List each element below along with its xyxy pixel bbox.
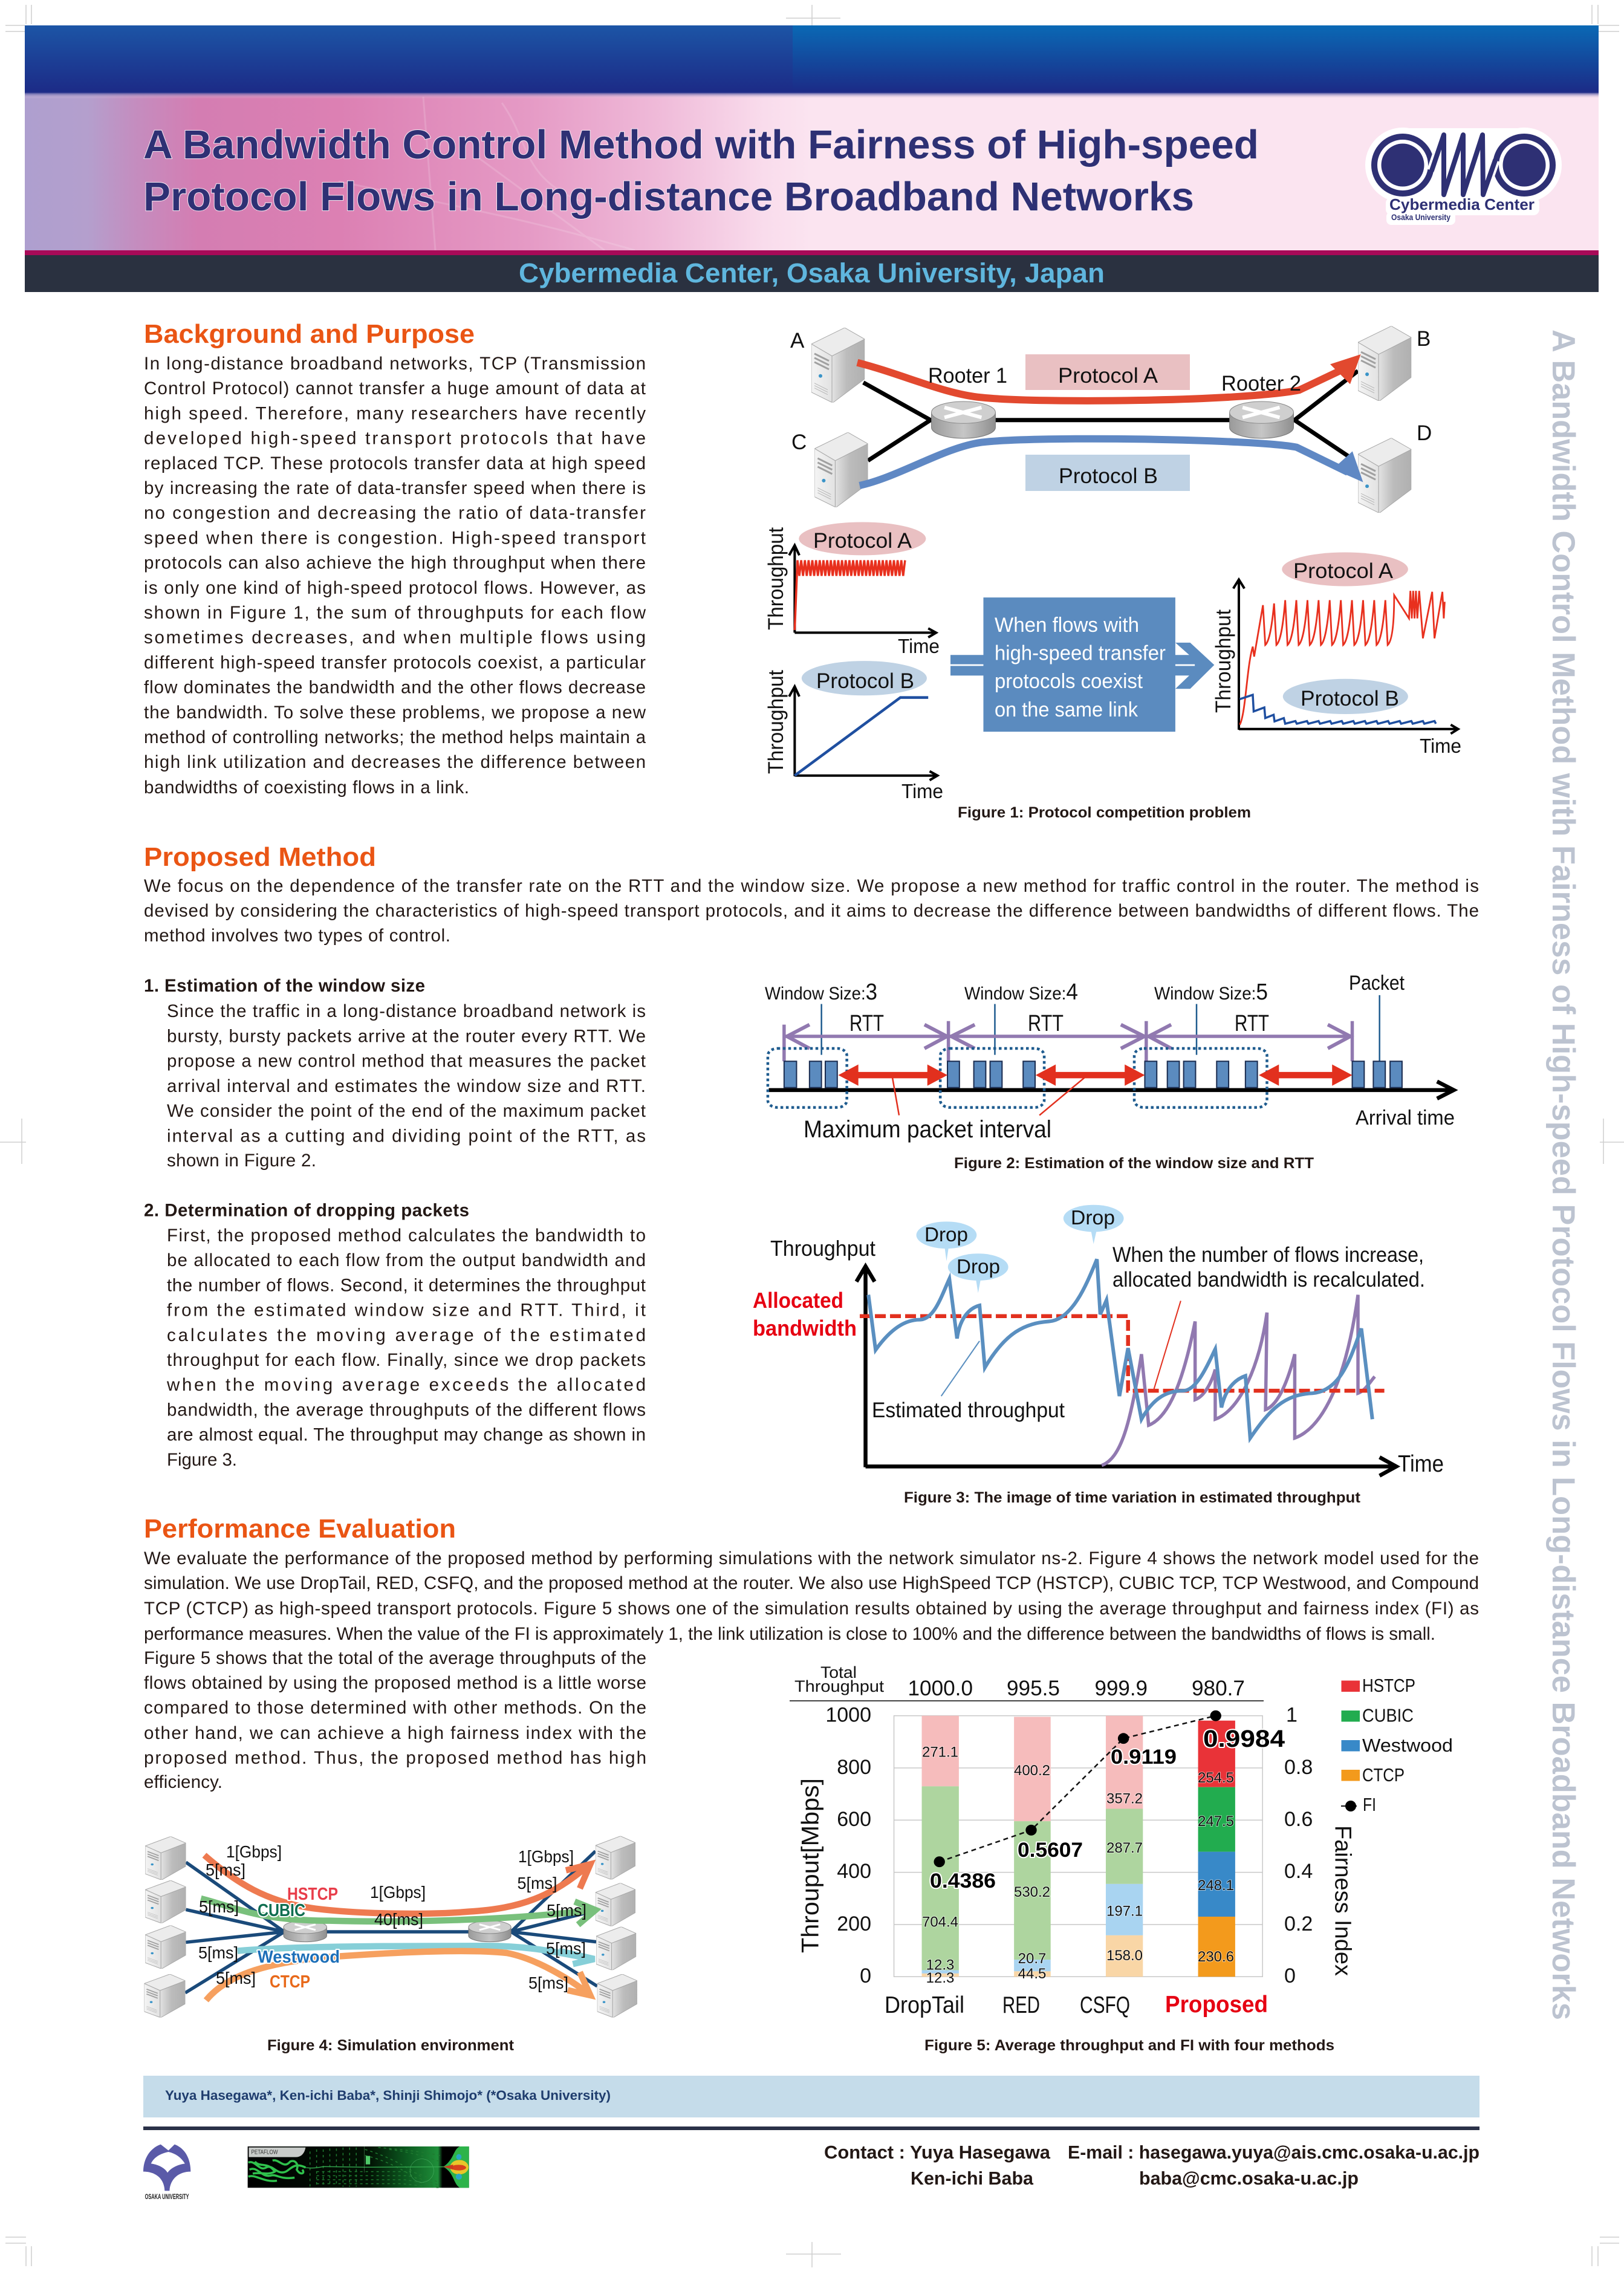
label: allocated bandwidth: Allocated xyxy=(753,1288,843,1313)
affiliation bar xyxy=(25,250,1599,292)
bar value labels: 230.6 xyxy=(1198,1949,1234,1965)
label: arrival time: Arrival time xyxy=(1356,1106,1455,1129)
logo: Cybermedia Center xyxy=(1365,128,1562,225)
text block: background paragraph: is only one kind of high-speed protocol flows. However, as xyxy=(144,578,646,598)
text block: evaluation result xyxy=(144,1648,646,1792)
body 2: Figure 3. xyxy=(167,1450,237,1470)
text block: performance evaluation intro: TCP (CTCP) as high-speed transport protocols. Figure 5 shows one of the simulation results obtained by using the average throughput and fairness index (FI) as xyxy=(144,1599,1479,1619)
text block: background paragraph xyxy=(144,354,646,798)
title xyxy=(143,122,1259,219)
axis label: time: Time xyxy=(1398,1451,1444,1477)
image: PETAFLOW visualisation xyxy=(248,2146,469,2188)
text block: evaluation result: efficiency. xyxy=(144,1772,222,1792)
chart: Protocol B throughput: Time xyxy=(901,780,943,802)
authors bar: Yuya Hasegawa*, Ken-ichi Baba*, Shinji Shimojo* (*Osaka University) xyxy=(165,2088,611,2103)
total throughput header: Throughput xyxy=(794,1677,885,1695)
text block: background paragraph: different high-speed transfer protocols coexist, a particular xyxy=(144,652,646,672)
text block: background paragraph: protocols can also achieve the high throughput when there xyxy=(144,553,646,573)
network diagram: A xyxy=(790,329,805,353)
chart: competition result: Protocol B xyxy=(1301,687,1399,710)
chart: Protocol A throughput: Protocol A xyxy=(813,529,912,553)
labels: window sizes xyxy=(765,980,1268,1005)
fairness index values xyxy=(930,1726,1285,1893)
annotation: recalculated: allocated bandwidth is recalculated. xyxy=(1112,1268,1425,1291)
figure 2: estimation of the window size and RTT xyxy=(765,972,1455,1172)
text block: background paragraph: no congestion and decreasing the ratio of data-transfer xyxy=(144,503,646,523)
text block: background paragraph: by increasing the rate of data-transfer speed when there is xyxy=(144,478,646,498)
logo: Cybermedia Center: Osaka University xyxy=(1391,212,1450,222)
protocol labels: Westwood xyxy=(258,1948,340,1967)
total throughput header: 980.7 xyxy=(1192,1677,1245,1700)
text block: performance evaluation intro: simulation. We use DropTail, RED, CSFQ, and the proposed method at the router. We also use HighSpeed TCP (HSTCP), CUBIC TCP, TCP Westwood, and Compound xyxy=(144,1573,1479,1593)
legend box: Protocol A xyxy=(1025,354,1190,390)
link labels: 5[ms] xyxy=(546,1939,586,1958)
text block: background paragraph: high speed. Therefore, many researchers have recently xyxy=(144,403,646,423)
link labels: 40[ms] xyxy=(374,1910,423,1929)
bar value labels: 12.3 xyxy=(926,1970,954,1986)
body 2: when the moving average exceeds the allocated xyxy=(166,1375,646,1395)
contact information: Contact : Yuya Hasegawa xyxy=(824,2142,1051,2163)
callout: flows coexist with arrow: protocols coexist xyxy=(995,670,1143,693)
link labels: 5[ms] xyxy=(198,1943,238,1962)
bar value labels: 400.2 xyxy=(1014,1763,1050,1779)
axis label: throughput: Throughput xyxy=(770,1236,875,1261)
header banner xyxy=(25,25,1599,292)
body 2: bandwidth, the average throughputs of the different flows xyxy=(167,1400,646,1420)
caption: figure 4: Figure 4: Simulation environment xyxy=(267,2037,515,2054)
text block: evaluation result: flows obtained by using the proposed method is a little worse xyxy=(144,1673,646,1693)
bar value labels: 704.4 xyxy=(922,1914,958,1930)
authors bar xyxy=(143,2076,1479,2117)
text block: proposed method intro: We focus on the dependence of the transfer rate on the RTT and the window size. We propose a new method for traffic control in the router. The method is xyxy=(144,876,1479,896)
network model xyxy=(145,1836,637,2018)
chart: Protocol B throughput xyxy=(764,661,943,802)
title: Protocol Flows in Long-distance Broadband Networks xyxy=(143,174,1194,219)
body 2: be allocated to each flow from the output bandwidth and xyxy=(167,1250,646,1270)
annotation: recalculated: When the number of flows increase, xyxy=(1112,1243,1424,1267)
labels: drop bubbles: Drop xyxy=(957,1255,1000,1278)
image: PETAFLOW visualisation: PETAFLOW xyxy=(252,2149,278,2156)
chart: Protocol A throughput: Time xyxy=(898,635,940,657)
network diagram xyxy=(790,326,1432,513)
heading: Performance Evaluation: Performance Evaluation xyxy=(144,1514,456,1544)
text block: evaluation result: proposed method. Thus, the proposed method has high xyxy=(144,1748,646,1768)
network diagram: Rooter 2 xyxy=(1221,372,1301,395)
labels: window sizes: Window Size:4 xyxy=(964,980,1078,1005)
protocol labels xyxy=(258,1885,340,1992)
network diagram: B xyxy=(1417,327,1431,351)
body 1: bursty, bursty packets arrive at the router every RTT. We xyxy=(167,1026,646,1046)
labels: RTT: RTT xyxy=(1235,1011,1269,1036)
right axis: 0 xyxy=(1284,1964,1296,1987)
protocol labels: CUBIC xyxy=(258,1901,305,1920)
affiliation bar: Cybermedia Center, Osaka University, Japan xyxy=(519,258,1105,288)
left axis: 0 xyxy=(860,1964,871,1987)
link labels: 5[ms] xyxy=(199,1897,239,1916)
chart: Protocol A throughput: Throughput xyxy=(764,527,788,630)
contact information: Ken-ichi Baba xyxy=(911,2168,1034,2189)
text block: background paragraph: Control Protocol) cannot transfer a huge amount of data at xyxy=(144,379,646,398)
method labels: CSFQ xyxy=(1080,1992,1130,2018)
link labels xyxy=(198,1842,586,1992)
footer divider xyxy=(143,2126,1479,2130)
labels: drop bubbles: Drop xyxy=(924,1223,968,1246)
legend: HSTCP xyxy=(1362,1675,1415,1696)
left axis: 800 xyxy=(837,1756,871,1779)
text block: performance evaluation intro: performance measures. When the value of the FI is approximately 1, the link utilization is close to 100% and the difference between the bandwidths of flows is small. xyxy=(144,1624,1435,1644)
banner pink background xyxy=(25,92,1599,250)
total throughput header: Total xyxy=(820,1663,857,1681)
network diagram: C xyxy=(791,430,807,454)
bar value labels: 357.2 xyxy=(1106,1791,1143,1807)
body 1: We consider the point of the end of the maximum packet xyxy=(167,1101,646,1121)
body 2: the number of flows. Second, it determines the throughput xyxy=(167,1275,646,1295)
text block: proposed method intro: devised by considering the characteristics of high-speed transport protocols, and it aims to decrease the difference between bandwidths of different flows. The xyxy=(144,901,1479,921)
label: estimated throughput: Estimated throughput xyxy=(872,1399,1065,1422)
link labels: 5[ms] xyxy=(206,1860,245,1879)
bar value labels: 271.1 xyxy=(922,1744,958,1761)
contact information: E-mail : hasegawa.yuya@ais.cmc.osaka-u.ac.jp xyxy=(1068,2142,1479,2163)
left axis: 200 xyxy=(837,1912,871,1935)
figure 1: protocol competition problem xyxy=(764,326,1461,821)
left axis: 600 xyxy=(837,1808,871,1831)
caption: figure 5: Figure 5: Average throughput and FI with four methods xyxy=(924,2037,1334,2054)
left axis: 1000 xyxy=(825,1704,871,1727)
legend box: Protocol B xyxy=(1025,455,1190,491)
right axis: 0.4 xyxy=(1284,1860,1313,1883)
label: maximum packet interval: Maximum packet interval xyxy=(804,1116,1051,1143)
stacked bar chart xyxy=(894,1716,1262,1977)
left axis: 400 xyxy=(837,1860,871,1883)
protocol labels: HSTCP xyxy=(287,1885,338,1904)
text block: estimation of the window size xyxy=(144,976,646,1171)
link labels: 1[Gbps] xyxy=(518,1847,574,1866)
body 2: are almost equal. The throughput may change as shown in xyxy=(167,1425,646,1445)
contact information xyxy=(824,2142,1479,2189)
callout: flows coexist with arrow xyxy=(950,597,1214,732)
body 2: calculates the moving average of the estimated xyxy=(167,1325,646,1345)
label: allocated bandwidth: bandwidth xyxy=(753,1316,857,1340)
logo: Osaka University: OSAKA UNIVERSITY xyxy=(145,2192,189,2201)
text block: background paragraph: bandwidths of coexisting flows in a link. xyxy=(144,778,469,798)
chart: competition result: Time xyxy=(1420,735,1461,757)
axis title: fairness index: Fairness Index xyxy=(1330,1825,1356,1976)
body 1: Since the traffic in a long-distance broadband network is xyxy=(167,1001,646,1021)
labels: RTT: RTT xyxy=(1028,1011,1064,1036)
text block: performance evaluation intro: We evaluate the performance of the proposed method by performing simulations with the network simulator ns-2. Figure 4 shows the network model used for the xyxy=(144,1548,1479,1568)
title: A Bandwidth Control Method with Fairness of High-speed xyxy=(143,122,1259,167)
throughput chart xyxy=(856,1205,1396,1476)
legend: CTCP xyxy=(1362,1764,1405,1785)
protocol labels: CTCP xyxy=(270,1972,310,1992)
fairness index values: 0.9119 xyxy=(1111,1746,1177,1769)
heading: Background and Purpose: Background and Purpose xyxy=(144,319,475,349)
method labels: Proposed xyxy=(1165,1992,1268,2018)
text block: evaluation result: Figure 5 shows that the total of the average throughputs of the xyxy=(144,1648,646,1668)
caption: figure 3: Figure 3: The image of time variation in estimated throughput xyxy=(904,1489,1361,1506)
right axis: 0.6 xyxy=(1284,1808,1313,1831)
chart: competition result: Protocol A xyxy=(1293,559,1394,583)
link labels: 5[ms] xyxy=(528,1974,568,1992)
chart: competition result xyxy=(1212,552,1461,757)
legend box: Protocol B: Protocol B xyxy=(1059,464,1158,488)
fairness index values: 0.9984 xyxy=(1203,1726,1285,1752)
legend: Westwood xyxy=(1362,1735,1453,1756)
callout: flows coexist with arrow: When flows with xyxy=(995,614,1139,637)
total throughput header: 1000.0 xyxy=(908,1677,973,1700)
text block: performance evaluation intro xyxy=(144,1548,1479,1644)
link labels: 1[Gbps] xyxy=(370,1883,426,1902)
bar value labels: 248.1 xyxy=(1198,1877,1234,1894)
network diagram: D xyxy=(1417,421,1432,445)
fairness index values: 0.5607 xyxy=(1018,1839,1083,1862)
total throughput header: 999.9 xyxy=(1094,1677,1148,1700)
chart: Protocol B throughput: Throughput xyxy=(764,670,788,774)
legend box: Protocol A: Protocol A xyxy=(1058,364,1158,388)
text block: determination of dropping packets xyxy=(144,1201,646,1470)
text block: background paragraph: shown in Figure 1, the sum of throughputs for each flow xyxy=(144,603,646,623)
body 2 xyxy=(166,1226,646,1470)
total throughput header xyxy=(790,1663,1264,1701)
figure 4: simulation environment xyxy=(145,1836,637,2054)
fairness index line xyxy=(934,1711,1221,1867)
link labels: 1[Gbps] xyxy=(226,1842,282,1861)
text block: background paragraph: method of controlling networks; the method helps maintain a xyxy=(144,727,646,747)
legend: FI xyxy=(1363,1794,1376,1815)
link labels: 5[ms] xyxy=(216,1969,256,1987)
heading: Proposed Method: Proposed Method xyxy=(144,842,376,872)
text block: background paragraph: high link utilization and decreases the difference between xyxy=(144,752,646,772)
text block: background paragraph: the bandwidth. To solve these problems, we propose a new xyxy=(144,703,646,723)
body 2: from the estimated window size and RTT. Third, it xyxy=(167,1301,646,1321)
legend xyxy=(1341,1675,1453,1815)
bar value labels: 247.5 xyxy=(1198,1813,1234,1830)
link labels: 5[ms] xyxy=(518,1874,557,1893)
text block: background paragraph: flow dominates the bandwidth and the other flows decrease xyxy=(144,678,646,698)
body 1: propose a new control method that measures the packet xyxy=(167,1051,646,1071)
caption: figure 2: Figure 2: Estimation of the window size and RTT xyxy=(954,1155,1314,1172)
subheading 2: 2. Determination of dropping packets xyxy=(144,1201,469,1220)
bar value labels: 287.7 xyxy=(1106,1840,1143,1856)
method labels: DropTail xyxy=(885,1992,964,2018)
bar value labels: 530.2 xyxy=(1014,1884,1050,1900)
legend: CUBIC xyxy=(1362,1705,1414,1726)
body 1: arrival interval and estimates the window size and RTT. xyxy=(167,1076,646,1096)
vertical side title: A Bandwidth Control Method with Fairness of High-speed Protocol Flows in Long-distance Broadband Networks xyxy=(1545,330,1581,2020)
text block: background paragraph: In long-distance broadband networks, TCP (Transmission xyxy=(144,354,646,374)
body 1 xyxy=(167,1001,646,1171)
bar value labels: 44.5 xyxy=(1018,1966,1046,1982)
axis title: throughput: Throuput[Mbps] xyxy=(797,1778,823,1953)
label: allocated bandwidth xyxy=(753,1288,857,1340)
label: packet: Packet xyxy=(1349,972,1405,995)
figure 5: average throughput and FI xyxy=(790,1663,1453,2054)
logo: Cybermedia Center: Cybermedia Center xyxy=(1389,195,1535,213)
labels: window sizes: Window Size:5 xyxy=(1154,980,1268,1005)
contact information: baba@cmc.osaka-u.ac.jp xyxy=(1139,2168,1359,2189)
bar value labels: 158.0 xyxy=(1106,1948,1143,1964)
text block: background paragraph: replaced TCP. These protocols transfer data at high speed xyxy=(144,453,646,473)
bar value labels: 254.5 xyxy=(1198,1770,1234,1786)
body 2: throughput for each flow. Finally, since we drop packets xyxy=(167,1350,646,1370)
fairness index values: 0.4386 xyxy=(930,1870,996,1893)
chart: competition result: Throughput xyxy=(1212,609,1235,713)
logo: Osaka University xyxy=(143,2145,190,2201)
chart: Protocol A throughput xyxy=(764,522,940,657)
network diagram: Rooter 1 xyxy=(928,364,1007,388)
method labels xyxy=(885,1992,1268,2018)
figure 3: time variation in estimated throughput xyxy=(753,1205,1444,1506)
right axis: 0.8 xyxy=(1284,1756,1313,1779)
labels: RTT: RTT xyxy=(849,1011,884,1036)
right axis: 0.2 xyxy=(1284,1912,1313,1935)
bar value labels: 12.3 xyxy=(926,1957,954,1974)
text block: background paragraph: sometimes decreases, and when multiple flows using xyxy=(144,628,646,648)
packet timeline xyxy=(768,995,1453,1116)
labels: window sizes: Window Size:3 xyxy=(765,980,877,1005)
total throughput header: 995.5 xyxy=(1007,1677,1060,1700)
callout: flows coexist with arrow: on the same link xyxy=(995,698,1138,721)
banner blue band xyxy=(25,25,1599,93)
right axis xyxy=(1284,1704,1313,1987)
body 1: shown in Figure 2. xyxy=(167,1151,316,1171)
text block: background paragraph: speed when there is congestion. High-speed transport xyxy=(144,528,646,548)
text block: evaluation result: other hand, we can achieve a high fairness index with the xyxy=(144,1723,646,1743)
text block: proposed method intro: method involves two types of control. xyxy=(144,926,450,946)
left axis xyxy=(825,1704,871,1987)
text block: evaluation result: compared to those determined with other methods. On the xyxy=(144,1698,646,1718)
annotation: recalculated xyxy=(1112,1243,1425,1291)
text block: background paragraph: developed high-speed transport protocols that have xyxy=(144,429,646,449)
bar value labels: 197.1 xyxy=(1106,1903,1143,1920)
labels: RTT xyxy=(849,1011,1269,1036)
bar value labels xyxy=(922,1744,1234,1986)
body 1: interval as a cutting and dividing point of the RTT, as xyxy=(167,1126,646,1146)
callout: flows coexist with arrow: high-speed transfer xyxy=(995,642,1166,665)
bar value labels: 20.7 xyxy=(1018,1951,1046,1967)
right axis: 1 xyxy=(1286,1704,1298,1727)
labels: drop bubbles xyxy=(924,1206,1115,1278)
link labels: 5[ms] xyxy=(547,1901,586,1920)
text block: proposed method intro xyxy=(144,876,1479,946)
labels: drop bubbles: Drop xyxy=(1071,1206,1115,1229)
subheading 1: 1. Estimation of the window size xyxy=(144,976,425,996)
method labels: RED xyxy=(1002,1992,1040,2018)
chart: Protocol B throughput: Protocol B xyxy=(816,669,914,693)
body 2: First, the proposed method calculates the bandwidth to xyxy=(167,1226,646,1246)
caption: figure 1: Figure 1: Protocol competition problem xyxy=(958,804,1251,821)
